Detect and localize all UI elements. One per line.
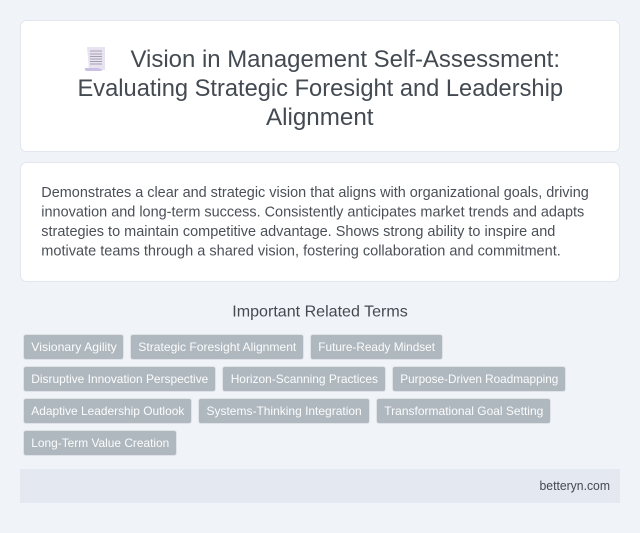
tag: Adaptive Leadership Outlook: Adaptive Leadership Outlook xyxy=(31,404,185,418)
title xyxy=(78,46,563,131)
tag: Transformational Goal Setting: Transformational Goal Setting xyxy=(384,404,543,418)
tag: Visionary Agility: Visionary Agility xyxy=(31,340,117,354)
tag: Strategic Foresight Alignment xyxy=(130,334,304,360)
tag group xyxy=(24,334,566,456)
tag: Transformational Goal Setting xyxy=(376,398,550,424)
icon: scroll document xyxy=(85,47,105,71)
description text: innovation and long-term success. Consistently anticipates market trends and adapts xyxy=(41,204,584,220)
description text: motivate teams through a shared vision, fostering collaboration and commitment. xyxy=(41,244,561,260)
tag: Long-Term Value Creation xyxy=(24,430,176,456)
panel: description card xyxy=(20,162,620,282)
tag: Future-Ready Mindset: Future-Ready Mindset xyxy=(318,340,436,354)
description text xyxy=(41,185,589,260)
tag: Systems-Thinking Integration xyxy=(198,398,370,424)
panel: title card xyxy=(20,20,620,152)
tag: Purpose-Driven Roadmapping: Purpose-Driven Roadmapping xyxy=(400,372,558,386)
description text: strategies to maintain competitive advantage. Shows strong ability to inspire and xyxy=(41,224,555,240)
footer xyxy=(20,469,620,503)
title: Alignment xyxy=(266,104,374,131)
tag: Purpose-Driven Roadmapping xyxy=(392,366,566,392)
tag: Long-Term Value Creation: Long-Term Value Creation xyxy=(31,436,169,450)
tag: Adaptive Leadership Outlook xyxy=(24,398,192,424)
tag: Strategic Foresight Alignment: Strategic Foresight Alignment xyxy=(138,340,297,354)
tag: Systems-Thinking Integration: Systems-Thinking Integration xyxy=(206,404,362,418)
tag: Future-Ready Mindset xyxy=(310,334,442,360)
description text: Demonstrates a clear and strategic vision that aligns with organizational goals, driving xyxy=(41,185,589,201)
tag: Disruptive Innovation Perspective: Disruptive Innovation Perspective xyxy=(31,372,209,386)
tag: Disruptive Innovation Perspective xyxy=(24,366,216,392)
title: Vision in Management Self-Assessment: xyxy=(130,46,560,73)
heading: important related terms: Important Related Terms xyxy=(232,304,408,320)
tag: Visionary Agility xyxy=(24,334,124,360)
title: Evaluating Strategic Foresight and Leadership xyxy=(78,75,563,102)
footer brand: betteryn.com xyxy=(540,479,610,493)
tag: Horizon-Scanning Practices xyxy=(222,366,386,392)
tag: Horizon-Scanning Practices: Horizon-Scanning Practices xyxy=(231,372,378,386)
